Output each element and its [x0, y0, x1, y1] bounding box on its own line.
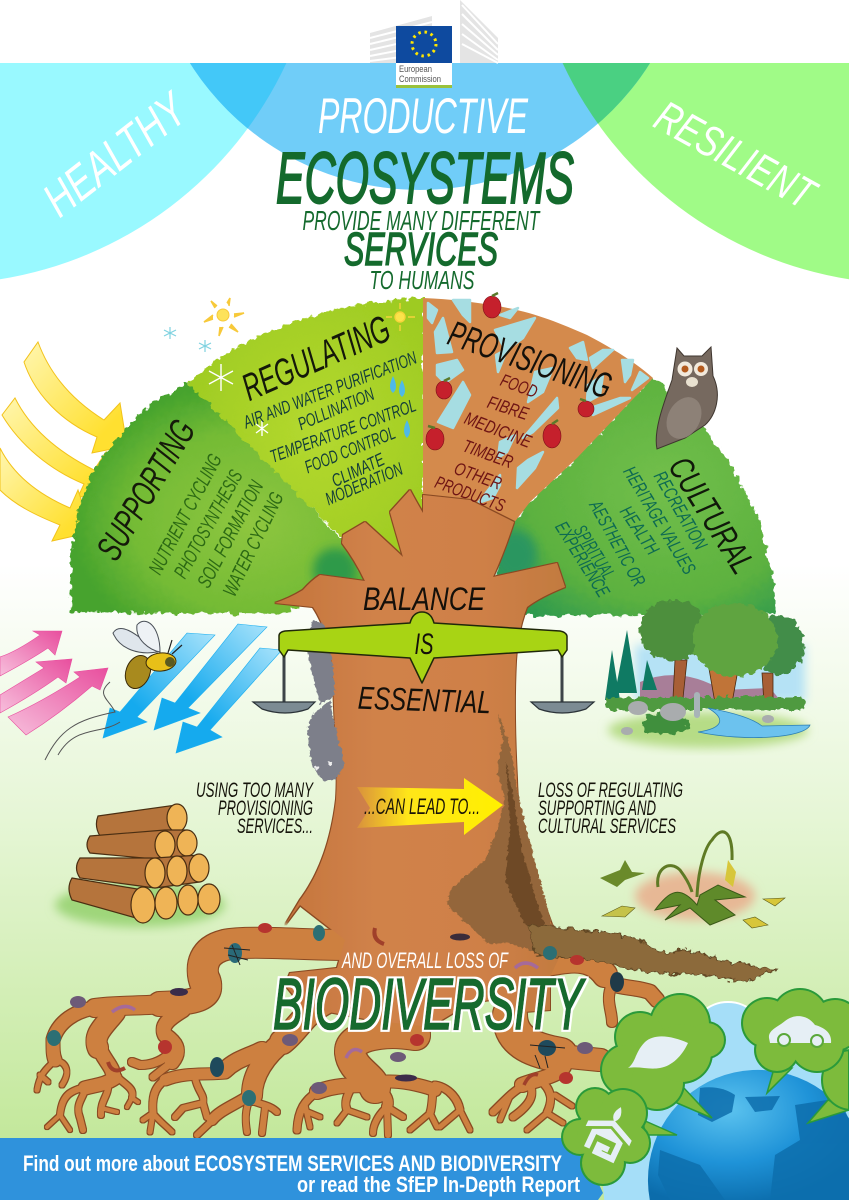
icon: squirrel: [306, 620, 345, 781]
tree trunk and roots: [37, 490, 657, 1135]
text: using too many provisioning services: SERVICES...: [237, 815, 313, 838]
label: regulating: [236, 308, 420, 509]
balance scale: [253, 612, 594, 713]
speech bubble: right edge: [808, 1050, 849, 1123]
heading: productive: PRODUCTIVE: [318, 88, 528, 144]
label: supporting: SUPPORTING: [88, 412, 203, 567]
root: far right: [540, 961, 657, 1022]
root: far left: [37, 943, 345, 1130]
root: centre right: [493, 1015, 600, 1130]
arrow: can lead to: [357, 778, 503, 835]
subtitle: provide many different: PROVIDE MANY DIFFERENT: [302, 205, 541, 236]
icon: sun in canopy: [386, 303, 415, 331]
icon: snowflakes: [164, 327, 211, 352]
trunk decay: [447, 713, 570, 958]
logo: European Commission: [370, 0, 498, 88]
label: cultural: AESTHETIC OR: [584, 497, 649, 591]
label: provisioning: PRODUCTS: [432, 472, 508, 516]
icon: electric car: [769, 1016, 831, 1047]
bugs on roots: [47, 923, 624, 1106]
label: provisioning: FIBRE: [485, 392, 532, 424]
heading: healthy: HEALTHY: [34, 82, 199, 227]
text: can lead to: ...CAN LEAD TO...: [364, 794, 480, 819]
label: regulating: REGULATING: [236, 308, 397, 410]
text: loss of regulating supporting and cultural services: CULTURAL SERVICES: [538, 815, 676, 838]
text: using too many provisioning services: [196, 779, 314, 838]
text: footer: or read the SfEP In-Depth Report: [297, 1172, 581, 1197]
title: biodiversity: BIODIVERSITY: [273, 965, 586, 1045]
panel: coloured header circles: [0, 63, 849, 279]
icons: white snowflakes: [209, 364, 268, 436]
trunk shape: [275, 490, 565, 1027]
label: provisioning: MEDICINE: [462, 408, 535, 452]
label: regulating: CLIMATE: [328, 449, 388, 491]
subtitle: to humans: TO HUMANS: [370, 265, 475, 295]
speech bubble: car: [741, 988, 849, 1093]
text: is: IS: [414, 628, 434, 661]
icons: apples: [426, 293, 594, 450]
text: balance: BALANCE: [363, 581, 486, 617]
label: regulating: AIR AND WATER PURIFICATION: [240, 347, 420, 433]
speech bubble: house: [561, 1087, 677, 1186]
text: loss of regulating supporting and cultural services: [538, 779, 683, 838]
sector: cultural: [495, 378, 776, 616]
label: provisioning: [432, 312, 617, 516]
text: and overall loss of: AND OVERALL LOSS OF: [341, 948, 509, 973]
label: supporting: NUTRIENT CYCLING: [145, 451, 227, 578]
text: using too many provisioning services: PROVISIONING: [218, 797, 313, 820]
text: essential: ESSENTIAL: [357, 680, 491, 720]
label: cultural: EXPERIENCE: [550, 518, 613, 602]
text: using too many provisioning services: USING TOO MANY: [196, 779, 314, 802]
sector: supporting: [71, 383, 370, 614]
label: provisioning: TIMBER: [460, 436, 516, 472]
panel: tree canopy sectors: [71, 298, 776, 616]
label: supporting: [88, 412, 289, 600]
icon: house: [576, 1097, 643, 1166]
text: footer: Find out more about ECOSYSTEM SERVICES AND BIODIVERSITY: [23, 1151, 562, 1176]
label: cultural: SPIRITUAL: [569, 522, 619, 584]
label: supporting: WATER CYCLING: [219, 489, 289, 600]
landscape with trees and pond: [605, 600, 810, 748]
icon: owl: [656, 347, 717, 449]
globe and halo: [603, 1002, 849, 1200]
root: centre left: [143, 1000, 330, 1135]
arrows: pink: [0, 631, 108, 735]
speech bubble: leaf: [600, 993, 726, 1118]
label: regulating: POLLINATION: [295, 384, 378, 434]
label: regulating: MODERATION: [322, 459, 406, 509]
bee flight trail: [45, 682, 120, 760]
icon: log pile: [55, 804, 225, 927]
text: loss of regulating supporting and cultural services: LOSS OF REGULATING: [538, 779, 683, 802]
logo: European Commission: European: [399, 64, 432, 74]
label: cultural: RECREATION: [649, 468, 711, 554]
label: supporting: SOIL FORMATION: [193, 477, 268, 592]
sector: regulating: [188, 298, 424, 560]
text: loss of regulating supporting and cultural services: SUPPORTING AND: [538, 797, 656, 820]
arrows: yellow sunlight: [0, 342, 127, 541]
label: provisioning: OTHER: [452, 458, 504, 494]
label: cultural: HEALTH: [615, 503, 663, 559]
arrows: blue: [103, 624, 282, 753]
label: provisioning: PROVISIONING: [443, 312, 617, 407]
label: cultural: HERITAGE VALUES: [618, 463, 699, 579]
icons: water drops: [390, 376, 410, 438]
root: centre: [297, 1033, 470, 1135]
text: footer: [23, 1151, 581, 1197]
logo: European Commission: Commission: [399, 74, 441, 84]
decayed root: [528, 925, 775, 982]
icon: sun: [204, 298, 244, 336]
label: cultural: [550, 450, 762, 602]
shading between branches: [313, 548, 357, 592]
title: ecosystems: ECOSYSTEMS: [276, 139, 574, 219]
icon: wilted plant: [600, 832, 785, 928]
label: supporting: PHOTOSYNTHESIS: [170, 466, 248, 582]
label: provisioning: FOOD: [498, 370, 540, 402]
label: regulating: TEMPERATURE CONTROL: [267, 395, 419, 467]
label: regulating: FOOD CONTROL: [302, 423, 398, 477]
footer bar: [0, 1138, 603, 1200]
sector: provisioning branches: [423, 298, 653, 565]
icon: leaf: [628, 1036, 688, 1069]
title: services: SERVICES: [344, 223, 498, 275]
icon: bee: [113, 621, 182, 692]
label: cultural: CULTURAL: [661, 450, 762, 581]
